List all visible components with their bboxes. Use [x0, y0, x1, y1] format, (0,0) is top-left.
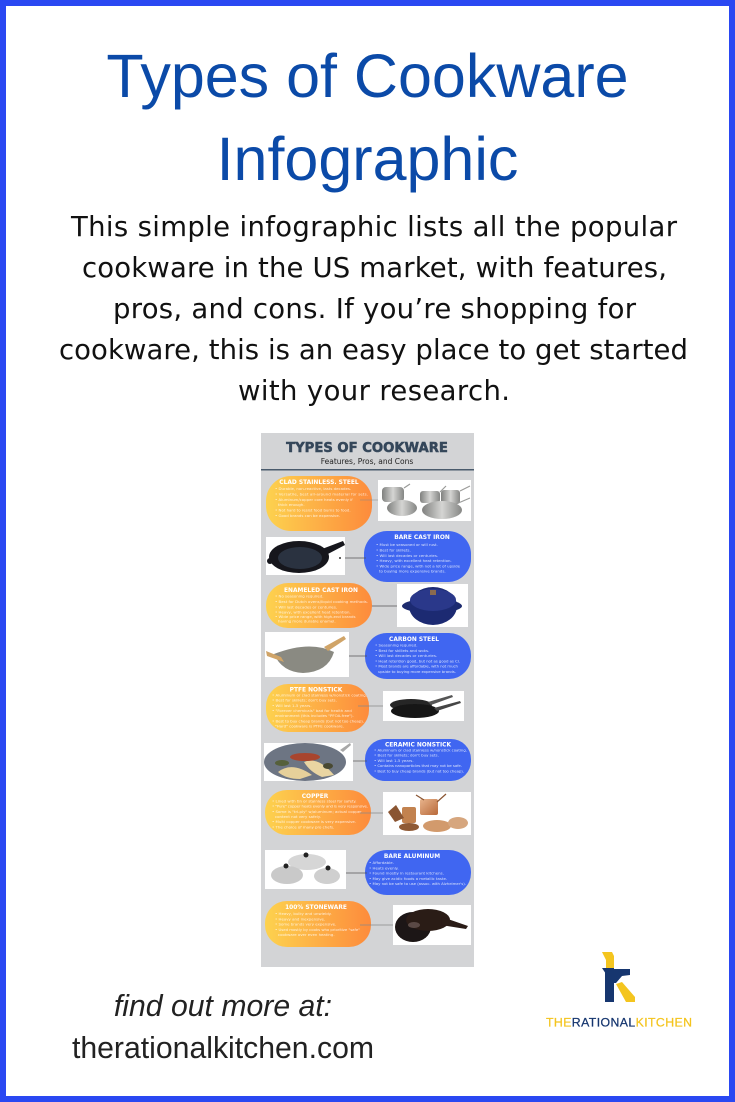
panel: enameled cast iron: • Will last decades or centuries. — [275, 604, 337, 610]
panel: carbon steel: • Seasoning required. — [375, 642, 417, 648]
infographic background — [261, 433, 474, 967]
panel: 100% stoneware: • Some brands very expensive. — [275, 922, 336, 926]
panel: ceramic nonstick — [264, 739, 471, 781]
panel: copper: • Some is "tri-ply" w/aluminum; actual copper — [272, 809, 362, 814]
title: Infographic — [217, 125, 518, 193]
panel: copper — [265, 790, 471, 835]
panel: PTFE nonstick: environment (this includes "PFOA-free"). — [275, 713, 354, 718]
infographic heading: Features, Pros, and Cons — [321, 457, 413, 466]
logo: The Rational Kitchen — [546, 952, 692, 1030]
panel: enameled cast iron: • Best for Dutch ovens/liquid cooking methods. — [275, 599, 368, 604]
photo: stoneware pan — [393, 905, 471, 945]
panel: carbon steel: upside to buying more expensive brands. — [378, 669, 456, 674]
panel: enameled cast iron: • Heavy, with excellent heat retention. — [275, 610, 351, 614]
panel: 100% stoneware: 100% STONEWARE — [285, 905, 347, 911]
panel: bare cast iron: • Heavy, with excellent heat retention. — [376, 558, 452, 563]
panel: clad stainless steel: • Durable, non-reactive, lasts decades. — [275, 486, 351, 491]
panel: 100% stoneware: • Used mostly by cooks who prioritize "safe" — [275, 927, 360, 932]
panel: clad stainless steel — [266, 476, 471, 531]
panel: copper: • "Pure" copper heats evenly and is very responsive. — [272, 804, 368, 808]
panel: carbon steel: CARBON STEEL — [389, 637, 439, 643]
panel: bare cast iron: • Best for skillets. — [376, 548, 411, 552]
panel: PTFE nonstick — [266, 684, 464, 732]
panel: ceramic nonstick: • Best for skillets; don't buy sets. — [374, 752, 439, 758]
panel: enameled cast iron: ENAMELED CAST IRON — [284, 588, 358, 594]
intro text — [59, 211, 688, 407]
photo: cast iron skillet — [266, 537, 345, 575]
intro text: cookware in the US market, with features, — [82, 252, 667, 284]
panel: 100% stoneware: cookware over even heating. — [278, 932, 335, 937]
panel: enameled cast iron: having more durable enamel. — [278, 618, 336, 624]
panel: clad stainless steel: • Versatile, best all-around material for sets. — [275, 492, 368, 496]
panel: PTFE nonstick: • Best for skillets; don't buy sets. — [272, 698, 337, 702]
call to action: find out more at: — [114, 990, 332, 1023]
photo: copper cookware — [383, 792, 471, 835]
panel: copper: • The choice of many pro chefs. — [272, 824, 334, 830]
panel: bare cast iron — [266, 531, 471, 582]
panel: bare aluminum: • Found mostly in restaurant kitchens. — [369, 870, 444, 876]
panel: PTFE nonstick: • Best to buy cheap brands (but not too cheap). — [272, 718, 364, 724]
intro text: pros, and cons. If you’re shopping for — [113, 293, 637, 325]
title — [106, 42, 629, 193]
intro text: This simple infographic lists all the popular — [70, 211, 678, 243]
panel: clad stainless steel: thick enough. — [278, 502, 305, 507]
panel: copper: • Multi copper cookware is very expensive. — [272, 819, 356, 824]
panel: bare aluminum: • May give acidic foods a metallic taste. — [369, 876, 447, 881]
panel: 100% stoneware — [265, 901, 471, 947]
panel: ceramic nonstick: • Best to buy cheap brands (but not too cheap). — [374, 768, 464, 774]
infographic heading: TYPES OF COOKWARE — [286, 441, 448, 456]
icon: letter k — [602, 952, 635, 1002]
photo: nonstick pans — [383, 691, 464, 721]
panel: bare aluminum: BARE ALUMINUM — [384, 854, 440, 860]
intro text: cookware, this is an easy place to get started — [59, 334, 688, 366]
panel: ceramic nonstick: • Contains nanoparticles that may not be safe. — [374, 763, 462, 768]
photo: ceramic pan with food — [264, 743, 353, 781]
logo wordmark: THERATIONALKITCHEN — [546, 1016, 692, 1030]
panel: PTFE nonstick: • Will last 1-5 years. — [272, 703, 312, 708]
panel: copper: COPPER — [302, 794, 329, 800]
panel: bare cast iron: to buying more expensive brands. — [379, 568, 446, 574]
photo: aluminum pots — [265, 850, 346, 889]
call to action: therationalkitchen.com — [72, 1032, 374, 1065]
connector — [340, 557, 366, 559]
panel: ceramic nonstick: CERAMIC NONSTICK — [385, 742, 451, 748]
panel: enameled cast iron — [266, 583, 468, 628]
photo: stainless pots — [378, 480, 471, 521]
call to action — [72, 990, 374, 1065]
panel: clad stainless steel: CLAD STAINLESS. STEEL — [279, 480, 359, 486]
panel: 100% stoneware: • Heavy and inexpensive. — [275, 916, 325, 922]
panel: carbon steel — [265, 632, 471, 679]
panel: bare aluminum: • Heats evenly. — [369, 866, 399, 870]
panel: PTFE nonstick: "Hard" cookware is PTFE cookware. — [275, 724, 344, 728]
panel: bare aluminum — [265, 850, 471, 895]
panel: 100% stoneware: • Heavy, bulky and unwieldy. — [275, 911, 332, 916]
panel: PTFE nonstick: • Aluminum or clad stainless w/nonstick coating. — [272, 692, 367, 698]
panel: copper: • Lined with tin or stainless steel for safety. — [272, 798, 357, 804]
panel: copper: content not very safely. — [275, 814, 321, 819]
panel: ceramic nonstick: • Will last 1-5 years. — [374, 758, 414, 763]
panel: clad stainless steel: • Not hard to resist food burns to food. — [275, 508, 351, 512]
panel: carbon steel: • Best for skillets and woks. — [375, 648, 429, 653]
panel: enameled cast iron: • Wide price range, with high-end brands — [275, 614, 356, 619]
panel: bare aluminum: • May not be safe to use (assoc. with Alzheimer's). — [369, 881, 466, 886]
panel: ceramic nonstick: • Aluminum or clad stainless w/nonstick coating. — [374, 748, 467, 752]
panel: enameled cast iron: • No seasoning required. — [275, 594, 324, 598]
intro text: with your research. — [238, 375, 510, 407]
embedded cookware infographic — [261, 433, 474, 967]
photo: carbon steel wok — [265, 632, 349, 677]
panel: carbon steel: • Most brands are affordable, with not much — [375, 664, 459, 668]
title: Types of Cookware — [106, 42, 629, 110]
panel: bare cast iron: • Must be seasoned or will rust. — [376, 542, 438, 547]
panel: carbon steel: • Heat retention good, but not as good as CI. — [375, 658, 460, 664]
panel: bare cast iron: • Wide price range, with not a lot of upside — [376, 564, 461, 568]
panel: bare aluminum: • Affordable. — [369, 860, 394, 865]
panel: bare cast iron: • Will last decades or centuries. — [376, 553, 438, 558]
infographic heading — [286, 441, 448, 466]
panel: carbon steel: • Will last decades or centuries. — [375, 653, 437, 658]
panel: PTFE nonstick: PTFE NONSTICK — [290, 688, 343, 694]
panel: bare cast iron: BARE CAST IRON — [394, 535, 450, 541]
panel: clad stainless steel: • Aluminum/copper core heats evenly if — [275, 497, 353, 502]
photo: blue dutch oven — [397, 584, 468, 627]
panel: PTFE nonstick: • "Forever chemicals" bad for health and — [272, 708, 352, 713]
panel: clad stainless steel: • Good brands can be expensive. — [275, 513, 340, 518]
